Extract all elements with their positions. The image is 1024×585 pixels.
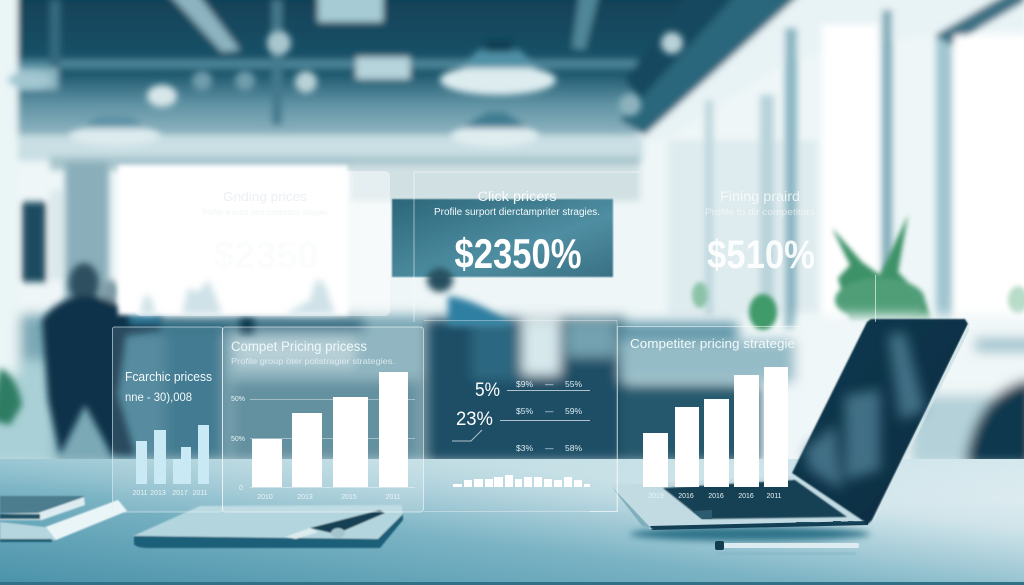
panel subtitle: Profile group öter polistragier strategies. [231, 357, 395, 366]
lower room behind panels [0, 315, 1024, 465]
connector lines [452, 390, 590, 441]
card subtitle: Profile around dent competitor stragies [202, 208, 328, 217]
stat rows: 58% [565, 443, 582, 453]
axis labels: 2016 [678, 493, 694, 500]
stat rows: $9% [516, 379, 533, 389]
panel: center statistics [424, 320, 617, 512]
axis labels [132, 490, 208, 497]
axis labels: 2013 [297, 494, 313, 501]
panel title: Compet Pricing pricess [231, 339, 367, 354]
axis labels: 2015 [341, 494, 357, 501]
stat rows: 55% [565, 379, 582, 389]
stat rows: — [545, 443, 554, 453]
y axis labels: 50% [231, 436, 245, 443]
ceiling lamps and spots [8, 31, 683, 147]
pen [310, 510, 385, 534]
screen reflections [805, 332, 925, 490]
card title: Fining praird [720, 189, 800, 204]
keyboard [663, 480, 847, 519]
stat rows: — [545, 406, 554, 416]
card value: $510% [707, 233, 815, 277]
stat rows: — [545, 379, 554, 389]
grid lines [250, 400, 415, 488]
laptop base [610, 476, 870, 529]
white window [118, 165, 348, 315]
silhouettes against window [140, 280, 335, 314]
panel: competitor bar chart [590, 326, 800, 512]
stat rows [516, 379, 582, 453]
stat 23%: 23% [456, 409, 493, 430]
plants [692, 215, 1024, 330]
laptop ports [796, 521, 854, 524]
trackpad edge [692, 510, 712, 519]
card value: $2350 [214, 235, 318, 277]
bars [252, 372, 408, 487]
mini histogram [453, 475, 590, 487]
stat rows: $3% [516, 443, 533, 453]
y axis labels [231, 396, 245, 492]
stylus on table [715, 541, 859, 555]
axis labels: 2016 [738, 493, 754, 500]
bars [643, 367, 788, 487]
notebooks left [0, 496, 127, 542]
axis labels: 2017 [172, 490, 188, 497]
axis labels: 2011 [766, 493, 782, 500]
laptop [610, 319, 969, 541]
axis labels: 2011 [192, 490, 208, 497]
axis labels: 2011 [385, 494, 401, 501]
panel: main bar chart [222, 327, 424, 512]
card title: Click pricers [478, 189, 557, 204]
panel subtitle: nne - 30),008 [125, 390, 192, 404]
people [0, 263, 512, 455]
panel: small bar chart [112, 327, 222, 512]
y axis labels: 0 [239, 485, 243, 492]
panel: top center card [414, 172, 640, 322]
ceiling and wall shapes [0, 0, 1024, 370]
axis labels: 2011 [132, 490, 148, 497]
stat rows: $5% [516, 406, 533, 416]
card subtitle: Profile surport dierctampriter stragies. [434, 207, 600, 218]
panel title: Competiter pricing strategie [630, 336, 795, 351]
axis labels: 2010 [257, 494, 273, 501]
axis labels: 2019 [648, 493, 664, 500]
wall screen [392, 199, 613, 277]
axis labels [257, 494, 401, 501]
card title: Gnding prices [223, 189, 308, 204]
stat 5%: 5% [475, 380, 500, 401]
axis labels [648, 493, 782, 500]
laptop screen [792, 319, 968, 524]
stat rows: 59% [565, 406, 582, 416]
panel: top left glass card [135, 171, 390, 316]
axis labels: 2013 [150, 490, 166, 497]
table surface [0, 459, 1024, 585]
card value: $2350% [454, 230, 582, 277]
table highlight [0, 459, 1024, 501]
panel title: Fcarchic pricess [125, 369, 212, 384]
notepad and pen [133, 505, 403, 548]
panel: top right card [705, 189, 876, 322]
axis labels: 2016 [708, 493, 724, 500]
table bottom edge [0, 582, 1024, 585]
y axis labels: 50% [231, 396, 245, 403]
bars [136, 425, 209, 484]
card subtitle: Profile to dir competitors [705, 207, 816, 217]
